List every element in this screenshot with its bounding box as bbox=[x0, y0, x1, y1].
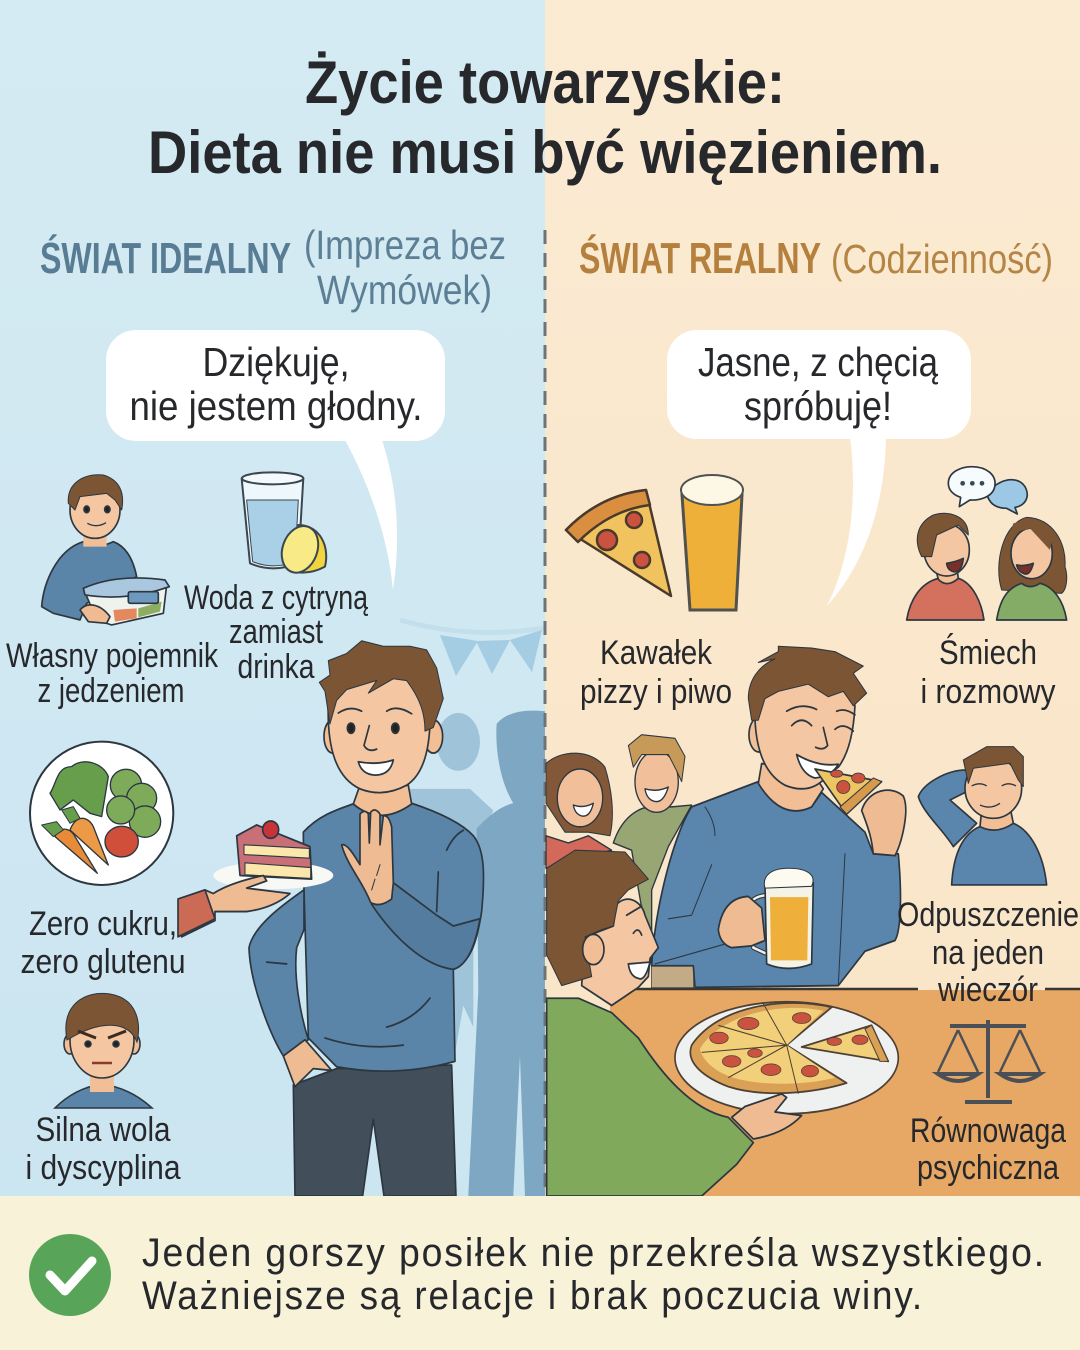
raised hand bbox=[342, 810, 393, 905]
mouth bbox=[628, 962, 650, 979]
hair bbox=[748, 646, 867, 720]
label: zero sugar: Zero cukru, bbox=[29, 905, 177, 943]
icon: glass of water with lemon bbox=[242, 472, 326, 578]
pants bbox=[293, 1065, 456, 1196]
face bbox=[755, 666, 855, 789]
neck bbox=[758, 764, 823, 811]
heading: ideal world: (Impreza bez bbox=[304, 222, 506, 268]
label: lemon water: drinka bbox=[238, 648, 315, 686]
title: Życie towarzyskie: bbox=[305, 49, 785, 116]
bunting bbox=[400, 620, 545, 676]
icon: relaxed man bbox=[918, 747, 1047, 885]
label: own container: Własny pojemnik bbox=[6, 637, 219, 675]
illustration: man eating pizza with beer bbox=[652, 646, 906, 987]
face bbox=[582, 899, 658, 1005]
label: pizza and beer: pizzy i piwo bbox=[580, 673, 732, 711]
hand in pocket bbox=[283, 1040, 332, 1087]
sweater bbox=[652, 782, 900, 987]
table edge bbox=[630, 988, 1080, 990]
sweater bbox=[303, 803, 484, 1071]
mouth bbox=[797, 755, 838, 778]
eating hand bbox=[862, 790, 906, 856]
label: own container bbox=[6, 637, 219, 710]
label: letting go for one evening: wieczór bbox=[937, 971, 1038, 1009]
panel: right background bbox=[545, 0, 1080, 1197]
icon: vegetable plate bbox=[30, 742, 173, 885]
label: willpower bbox=[26, 1111, 181, 1187]
heading: real world bbox=[579, 233, 1053, 283]
plate bbox=[213, 862, 333, 889]
neck bbox=[353, 785, 412, 815]
background silhouettes bbox=[410, 711, 545, 1196]
label: pizza and beer: Kawałek bbox=[600, 634, 713, 672]
footer text bbox=[142, 1231, 1046, 1318]
heading: real world: ŚWIAT REALNY bbox=[579, 233, 821, 283]
ear bbox=[583, 934, 604, 965]
title bbox=[148, 49, 942, 186]
illustration: friend in front bbox=[547, 850, 802, 1196]
speech bubble: right: spróbuję! bbox=[744, 383, 892, 429]
label: laughter and talks: i rozmowy bbox=[920, 673, 1056, 711]
icon: pizza slice bbox=[566, 490, 671, 596]
speech bubble: left bbox=[106, 330, 445, 590]
label: mental balance bbox=[910, 1112, 1066, 1187]
beer mug bbox=[747, 895, 765, 953]
label: willpower: i dyscyplina bbox=[26, 1149, 181, 1187]
title: Dieta nie musi być więzieniem. bbox=[148, 119, 942, 186]
speech bubble: right bbox=[667, 330, 971, 606]
speech bubble: right: Jasne, z chęcią bbox=[698, 339, 938, 385]
icon: beer glass bbox=[681, 475, 743, 610]
heading: ideal world bbox=[40, 222, 506, 313]
mouth bbox=[358, 760, 393, 775]
label: own container: z jedzeniem bbox=[38, 672, 184, 710]
hair bbox=[319, 641, 443, 731]
eyes bbox=[347, 723, 355, 733]
icon: friends talking bbox=[907, 467, 1067, 620]
icon: determined face bbox=[55, 993, 152, 1108]
hair bbox=[547, 850, 648, 986]
shirt bbox=[547, 998, 753, 1196]
hand on tray bbox=[732, 1094, 802, 1139]
icon: balance scales bbox=[938, 1020, 1040, 1102]
pizza bite bbox=[815, 769, 882, 814]
mug hand bbox=[718, 896, 765, 948]
label: letting go for one evening: na jeden bbox=[932, 934, 1044, 972]
giving hand bbox=[182, 875, 290, 937]
illustration: friends behind bbox=[546, 735, 693, 987]
label: laughter and talks: Śmiech bbox=[939, 633, 1037, 672]
table bbox=[610, 990, 1080, 1196]
speech bubble: left: Dziękuję, bbox=[202, 339, 350, 385]
label: willpower: Silna wola bbox=[36, 1111, 171, 1149]
label: lemon water: zamiast bbox=[229, 613, 323, 651]
label: zero sugar bbox=[20, 905, 186, 981]
label: zero sugar: zero glutenu bbox=[20, 943, 186, 981]
closed eyes bbox=[787, 706, 855, 749]
label: laughter and talks bbox=[920, 633, 1056, 711]
cake bbox=[237, 825, 312, 879]
icon: man with lunchbox bbox=[42, 475, 169, 625]
label: pizza and beer bbox=[580, 634, 732, 711]
speech bubble: left: nie jestem głodny. bbox=[130, 383, 422, 429]
divider bbox=[544, 230, 546, 1195]
footer text: Ważniejsze są relacje i brak poczucia winy. bbox=[142, 1274, 924, 1318]
illustration: pizza on tray bbox=[675, 1002, 898, 1114]
ears bbox=[324, 720, 341, 753]
label: lemon water bbox=[184, 579, 368, 686]
icon: green check bbox=[29, 1234, 111, 1316]
footer band bbox=[0, 1196, 1080, 1350]
illustration: man declining cake bbox=[178, 641, 484, 1196]
label: lemon water: Woda z cytryną bbox=[184, 579, 368, 617]
heading: ideal world: Wymówek) bbox=[317, 267, 492, 313]
panel: left background bbox=[0, 0, 545, 1197]
label: letting go for one evening bbox=[897, 896, 1079, 1009]
ear bbox=[749, 717, 769, 752]
face bbox=[328, 673, 430, 793]
heading: ideal world: ŚWIAT IDEALNY bbox=[40, 233, 291, 283]
